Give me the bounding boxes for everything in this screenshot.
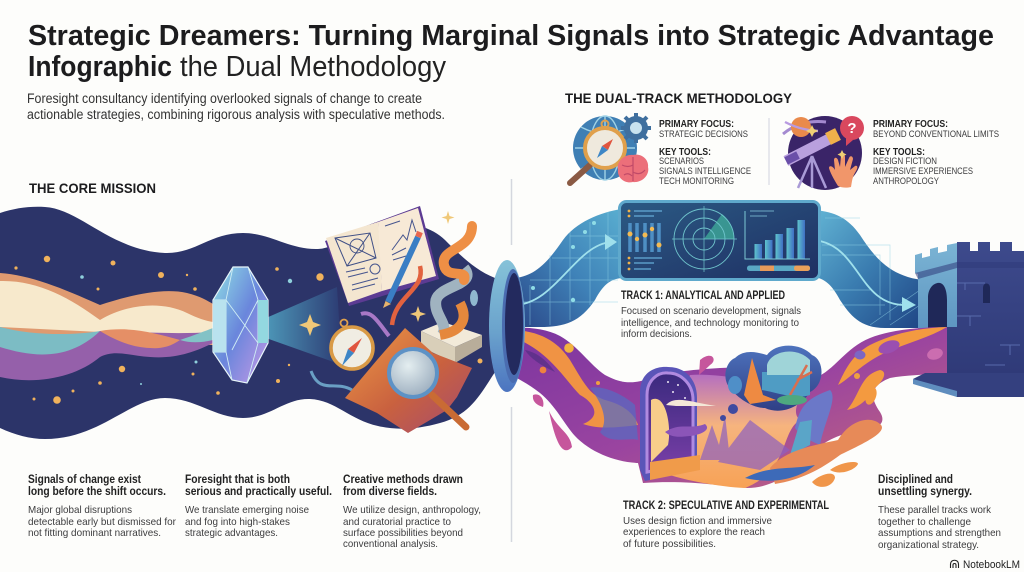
text: foresight xyxy=(185,474,332,539)
purple stream xyxy=(510,327,947,488)
text: synergy: assumptions and strengthen xyxy=(878,527,1001,539)
text: track 1 focus and tools: TECH MONITORING xyxy=(659,176,734,187)
illustration: analytical track xyxy=(514,202,922,328)
castle base xyxy=(913,373,1024,397)
text: foresight: strategic advantages. xyxy=(185,527,278,539)
text: track 2: experiences to explore the reach xyxy=(623,526,765,538)
title: the Dual Methodology xyxy=(180,51,446,83)
sparkles xyxy=(299,211,454,336)
text: track 2 focus and tools: BEYOND CONVENTIONAL LIMITS xyxy=(873,129,999,140)
text: track 2 focus and tools: ANTHROPOLOGY xyxy=(873,176,939,187)
title: Infographic xyxy=(28,51,172,83)
castle xyxy=(915,242,1024,374)
text: creative methods xyxy=(343,474,481,550)
tower front xyxy=(947,242,1024,374)
text: signals: long before the shift occurs. xyxy=(28,486,166,498)
text: track 1: intelligence, and technology monitoring to xyxy=(621,317,799,329)
sunset landscape xyxy=(655,375,815,488)
intro text: actionable strategies, combining rigorous analysis with speculative methods. xyxy=(27,107,445,122)
text: track 2: TRACK 2: SPECULATIVE AND EXPERIMENTAL xyxy=(623,500,829,512)
text: track 1 focus and tools xyxy=(659,119,751,187)
title xyxy=(28,20,994,83)
text: track 2: Uses design fiction and immersive xyxy=(623,515,772,527)
intro text xyxy=(27,91,445,122)
ribbons xyxy=(392,266,421,325)
left blue stream xyxy=(515,209,622,327)
text: creative methods: surface possibilities beyond xyxy=(343,527,463,539)
text: track 2 focus and tools: DESIGN FICTION xyxy=(873,156,937,167)
text: signals: not fitting dominant narratives. xyxy=(28,527,161,539)
text: track 2 focus and tools xyxy=(873,119,999,187)
text: signals: Major global disruptions xyxy=(28,504,132,516)
heading: the core mission: THE CORE MISSION xyxy=(29,180,156,196)
text: foresight: Foresight that is both xyxy=(185,474,290,486)
heading: the dual-track methodology: THE DUAL-TRACK METHODOLOGY xyxy=(565,90,793,106)
text: track 1 xyxy=(621,290,801,340)
sliders xyxy=(628,210,662,270)
text: creative methods: conventional analysis. xyxy=(343,538,438,550)
thought bubble xyxy=(725,346,822,411)
intro text: Foresight consultancy identifying overlooked signals of change to create xyxy=(27,91,422,106)
incoming wave bands xyxy=(0,273,213,345)
door xyxy=(928,283,947,328)
text: track 1 focus and tools: SCENARIOS xyxy=(659,156,704,167)
notebooklm credit: NotebookLM xyxy=(963,559,1020,571)
text: signals: Signals of change exist xyxy=(28,474,141,486)
text: creative methods: from diverse fields. xyxy=(343,486,437,498)
text: track 2 focus and tools: IMMERSIVE EXPERIENCES xyxy=(873,166,973,177)
text: track 2: of future possibilities. xyxy=(623,538,716,550)
star field xyxy=(14,256,483,404)
text: track 1: TRACK 1: ANALYTICAL AND APPLIED xyxy=(621,290,785,302)
swirl: orange right xyxy=(838,327,947,385)
icon: telescope: ? xyxy=(847,120,857,137)
text: track 1: Focused on scenario development, signals xyxy=(621,305,801,317)
text: track 1 focus and tools: STRATEGIC DECISIONS xyxy=(659,129,748,140)
title: Strategic Dreamers: Turning Marginal Signals into Strategic Advantage xyxy=(28,20,994,52)
icon: compass globe xyxy=(570,113,651,183)
text: track 2 xyxy=(623,500,829,550)
light beam xyxy=(266,287,342,365)
sculpture on pedestal xyxy=(421,226,482,363)
text: track 1 focus and tools: PRIMARY FOCUS: xyxy=(659,119,734,130)
text: signals: detectable early but dismissed for xyxy=(28,516,176,528)
text: creative methods: Creative methods drawn xyxy=(343,474,463,486)
right blue stream xyxy=(815,210,922,328)
text: track 1 focus and tools: KEY TOOLS: xyxy=(659,147,711,158)
text: synergy: organizational strategy. xyxy=(878,539,979,551)
text: synergy: together to challenge xyxy=(878,516,971,528)
pipe flange xyxy=(489,260,525,392)
text: track 1 focus and tools: SIGNALS INTELLIGENCE xyxy=(659,166,751,177)
text: synergy: These parallel tracks work xyxy=(878,504,992,516)
text: signals xyxy=(28,474,176,539)
illustration: signal stream through prism xyxy=(0,206,495,439)
portal door xyxy=(640,367,716,481)
magnifying glass xyxy=(389,349,466,427)
text: foresight: and fog into high-stakes xyxy=(185,516,290,528)
text: track 2 focus and tools: KEY TOOLS: xyxy=(873,147,925,158)
text: creative methods: We utilize design, anthropology, xyxy=(343,504,481,516)
text: creative methods: and curatorial practice to xyxy=(343,516,451,528)
droplets xyxy=(533,356,714,450)
swirl: orange left xyxy=(515,330,638,428)
tower side xyxy=(915,243,957,373)
open book xyxy=(325,206,439,308)
icon: telescope xyxy=(783,116,864,190)
text: synergy xyxy=(878,474,1001,551)
text: foresight: serious and practically useful. xyxy=(185,486,332,498)
text: synergy: unsettling synergy. xyxy=(878,486,972,498)
dashboard panel xyxy=(620,202,820,280)
text: track 1: inform decisions. xyxy=(621,328,692,340)
radar xyxy=(672,206,737,272)
flow arrows xyxy=(514,242,611,305)
navy stream xyxy=(0,207,495,439)
text: foresight: We translate emerging noise xyxy=(185,504,309,516)
prism xyxy=(213,267,268,383)
window xyxy=(983,284,990,303)
woven cloth xyxy=(345,328,472,433)
text: synergy: Disciplined and xyxy=(878,474,953,486)
compass xyxy=(331,320,373,369)
bar chart xyxy=(745,211,810,271)
text: track 2 focus and tools: PRIMARY FOCUS: xyxy=(873,119,948,130)
illustration: speculative track xyxy=(510,327,947,488)
